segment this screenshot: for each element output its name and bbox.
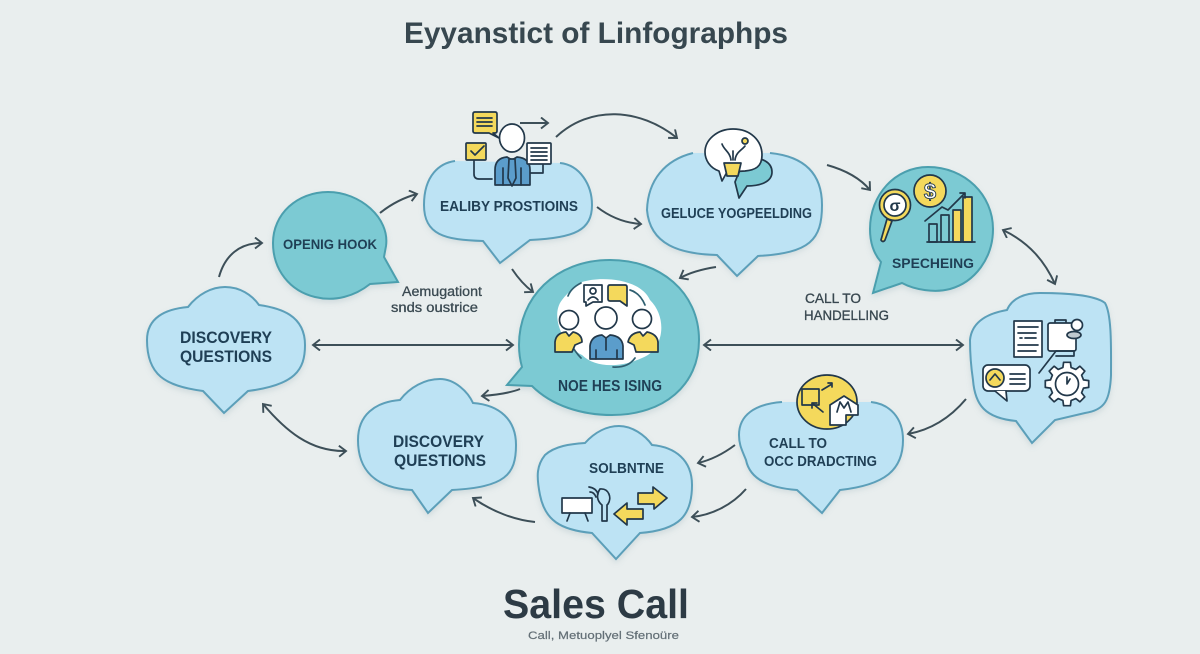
bubble: discovery questions lower: DISCOVERY xyxy=(393,432,485,451)
subtitle: Call, Metuoplyel Sfenoüre xyxy=(528,630,679,642)
bubble: discovery questions lower: QUESTIONS xyxy=(394,451,486,470)
bubble: specheing: SPECHEING xyxy=(892,255,974,271)
bubble: central noe hes ising: NOE HES ISING xyxy=(558,378,662,395)
caption: argumentation xyxy=(391,284,482,315)
bubble: central noe hes ising xyxy=(507,260,699,415)
heading: sales call: Sales Call xyxy=(503,581,689,627)
bubble: solbntne: SOLBNTNE xyxy=(589,461,664,477)
bubble: geluce yogpeelding: GELUCE YOGPEELDING xyxy=(661,206,812,222)
icon: documents, stamp, chat and gear xyxy=(983,320,1089,406)
caption: argumentation: snds oustrice xyxy=(391,300,478,315)
title: Eyyanstict of Linfographps xyxy=(404,17,788,50)
icon: yellow cycle badge xyxy=(797,375,858,429)
bubble: solbntne xyxy=(538,426,692,559)
bubble: specheing xyxy=(870,167,993,293)
bubble: early propositions: EALIBY PROSTIOINS xyxy=(440,199,578,215)
icon: light bulb idea xyxy=(705,129,772,198)
caption: call to handelling: HANDELLING xyxy=(804,308,889,323)
bubble: discovery questions left: QUESTIONS xyxy=(180,347,272,366)
icon: magnifier, dollar and bar chart xyxy=(880,175,975,242)
caption: call to handelling xyxy=(804,291,889,323)
icon: presenter with notes xyxy=(466,112,551,186)
bubble: call to occ dradcting: CALL TO xyxy=(769,436,827,452)
bubble: opening hook xyxy=(273,192,398,299)
caption: argumentation: Aemugationt xyxy=(402,284,482,299)
bubble: geluce yogpeelding xyxy=(647,129,822,276)
bubble: call to occ dradcting xyxy=(739,375,903,513)
flow arrows xyxy=(219,114,1055,522)
icon: magnifier, dollar and bar chart: $ xyxy=(924,179,936,204)
bubble: early propositions xyxy=(424,112,592,263)
bubble: discovery questions left: DISCOVERY xyxy=(180,328,273,347)
icon: team with chat bubbles xyxy=(555,279,661,367)
caption: call to handelling: CALL TO xyxy=(805,291,861,306)
bubble: right document and gear xyxy=(970,293,1111,443)
icon: magnifier, dollar and bar chart: σ xyxy=(890,198,901,215)
icon: board and arrows xyxy=(562,487,667,525)
bubble: discovery questions left xyxy=(147,287,305,413)
bubble: discovery questions lower xyxy=(358,379,516,513)
bubble: opening hook: OPENIG HOOK xyxy=(283,236,377,252)
bubble: call to occ dradcting: OCC DRADCTING xyxy=(764,454,877,470)
